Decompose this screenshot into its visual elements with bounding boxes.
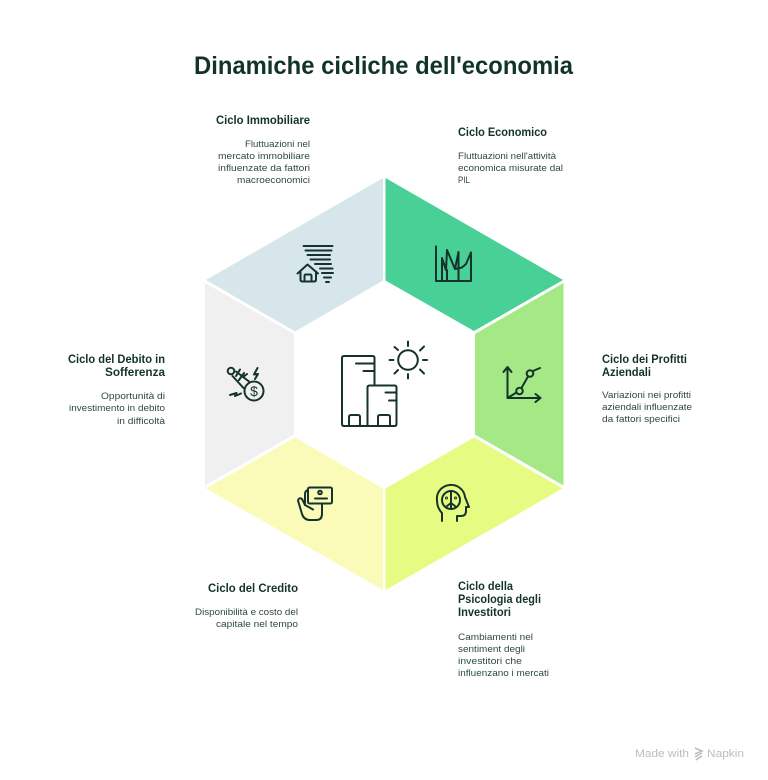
text: Ciclo dei Profitti Aziendali: Ciclo dei Profitti: [602, 354, 687, 366]
text: Ciclo Economico: Ciclo Economico: [458, 127, 547, 139]
text: Ciclo della Psicologia degli Investitori: investitori che: [458, 656, 522, 667]
hexagon diagram: [205, 178, 564, 590]
text: Ciclo Economico: PIL: [458, 175, 470, 186]
icon: hand holding card: [298, 488, 332, 520]
text: Ciclo Immobiliare: influenzate da fattori: [218, 163, 310, 174]
watermark: Made with Napkin: Napkin: [707, 748, 744, 760]
text: Ciclo della Psicologia degli Investitori: Psicologia degli: [458, 594, 541, 606]
text: Ciclo Immobiliare: [216, 115, 310, 186]
text: Ciclo Immobiliare: macroeconomici: [237, 175, 310, 186]
text: Ciclo del Debito in Sofferenza: investimento in debito: [69, 403, 165, 414]
segment: Ciclo Immobiliare: [206, 178, 383, 332]
icon: line chart with nodes: [504, 367, 540, 402]
text: Ciclo Immobiliare: Ciclo Immobiliare: [216, 115, 310, 127]
text: Ciclo della Psicologia degli Investitori: sentiment degli: [458, 644, 525, 655]
text: Ciclo del Debito in Sofferenza: [68, 354, 166, 427]
text: Ciclo dei Profitti Aziendali: da fattori specifici: [602, 414, 680, 425]
text: Ciclo Economico: [458, 127, 563, 186]
segment: Ciclo del Credito: [206, 438, 383, 590]
icon: thermometer and coin: [228, 368, 264, 400]
text: Ciclo dei Profitti Aziendali: aziendali influenzate: [602, 402, 692, 413]
watermark: Made with Napkin: [635, 748, 744, 760]
icon: house and tornado: [298, 246, 333, 282]
text: Ciclo del Debito in Sofferenza: Ciclo del Debito in: [68, 354, 165, 366]
segment: Ciclo della Psicologia degli Investitori: [386, 438, 562, 590]
text: Ciclo del Debito in Sofferenza: Opportunità di: [101, 391, 165, 402]
text: Ciclo del Debito in Sofferenza: Sofferenza: [105, 367, 166, 379]
text: Ciclo dei Profitti Aziendali: [602, 354, 692, 425]
segment: Ciclo dei Profitti Aziendali: [475, 283, 564, 486]
text: Ciclo dei Profitti Aziendali: Aziendali: [602, 367, 651, 379]
text: Ciclo della Psicologia degli Investitori: influenzano i mercati: [458, 668, 549, 679]
text: Ciclo del Credito: [195, 583, 298, 630]
title: Dinamiche cicliche dell'economia: [194, 52, 574, 80]
text: Ciclo della Psicologia degli Investitori: Investitori: [458, 607, 511, 619]
text: Ciclo della Psicologia degli Investitori: [458, 581, 549, 679]
segment: Ciclo Economico: [386, 178, 563, 331]
icon: economic chart: [436, 246, 471, 281]
icon: buildings and sun: [342, 342, 427, 426]
icon: head with brain: [437, 485, 469, 521]
text: Ciclo Immobiliare: Fluttuazioni nel: [245, 139, 310, 150]
text: Ciclo dei Profitti Aziendali: Variazioni nei profitti: [602, 390, 691, 401]
text: Ciclo Immobiliare: mercato immobiliare: [218, 151, 310, 162]
text: Ciclo del Credito: Disponibilità e costo del: [195, 607, 298, 618]
text: Ciclo Economico: economica misurate dal: [458, 163, 563, 174]
text: Ciclo Economico: Fluttuazioni nell'attività: [458, 151, 557, 162]
text: Ciclo della Psicologia degli Investitori: Ciclo della: [458, 581, 514, 593]
segment: Ciclo del Debito in Sofferenza: [205, 283, 294, 486]
icon: thermometer and coin: $: [250, 383, 258, 399]
text: Ciclo del Credito: Ciclo del Credito: [208, 583, 298, 595]
watermark: Made with Napkin: Made with: [635, 748, 689, 760]
text: Ciclo del Credito: capitale nel tempo: [216, 619, 298, 630]
text: Ciclo della Psicologia degli Investitori: Cambiamenti nel: [458, 632, 533, 643]
text: Ciclo del Debito in Sofferenza: in difficoltà: [117, 416, 166, 427]
